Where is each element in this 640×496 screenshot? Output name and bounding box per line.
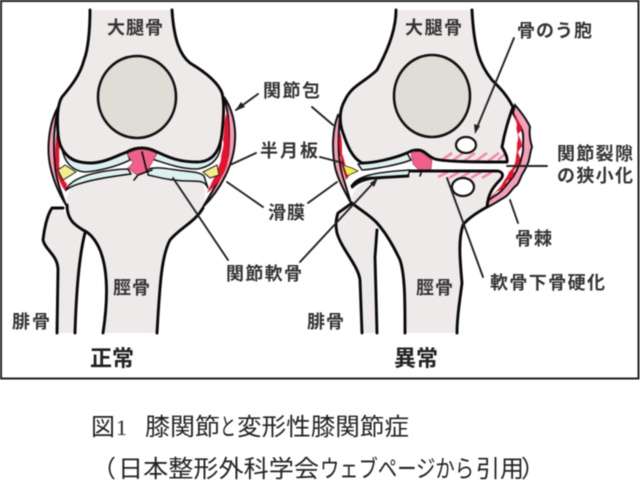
label: capsule: 関節包 bbox=[263, 80, 320, 101]
femur marrow circle bbox=[98, 56, 176, 138]
leader: joint space bbox=[507, 165, 547, 167]
panel: normal knee bbox=[43, 10, 235, 333]
arrow: capsule right bbox=[312, 107, 333, 125]
caption line 2: ） bbox=[521, 456, 545, 483]
normal femur bbox=[57, 10, 223, 163]
bone cyst lower bbox=[452, 178, 474, 196]
label: abnormal: 異常 bbox=[394, 346, 438, 371]
label: tibia normal: 脛骨 bbox=[113, 278, 150, 298]
arrowhead: bone cyst bbox=[474, 124, 480, 134]
caption line 1: と bbox=[220, 414, 236, 441]
normal meniscus right bbox=[203, 165, 219, 178]
abnormal meniscus bbox=[343, 165, 358, 176]
abnormal tibia bbox=[352, 171, 502, 333]
femur marrow circle bbox=[394, 55, 470, 137]
normal femoral cartilage right bbox=[152, 138, 221, 169]
leader: osteophyte bbox=[510, 200, 518, 223]
arrow: capsule left bbox=[236, 94, 258, 110]
caption line 1: 1 bbox=[116, 415, 127, 440]
caption line 1 bbox=[91, 414, 409, 441]
label: articular cartilage: 関節軟骨 bbox=[226, 263, 302, 284]
label: bone cyst: 骨のう胞 bbox=[517, 21, 592, 41]
abnormal femoral cartilage bbox=[358, 153, 411, 170]
leader: meniscus left bbox=[230, 153, 256, 165]
abnormal synovium right bbox=[489, 112, 522, 200]
caption line 1: 図 bbox=[91, 414, 115, 441]
label: synovium: 滑膜 bbox=[268, 202, 305, 223]
abnormal capsule left bbox=[333, 115, 351, 203]
abnormal ligament bbox=[411, 151, 432, 171]
leader lines and arrows bbox=[173, 38, 547, 277]
label: tibia abnormal: 脛骨 bbox=[416, 278, 453, 298]
label: joint space line 1: 関節裂隙 bbox=[557, 143, 633, 164]
label: subchondral sclerosis: 軟骨下骨硬化 bbox=[490, 273, 605, 293]
leader: bone cyst bbox=[476, 38, 514, 130]
normal cruciate ligament bbox=[127, 149, 157, 175]
figure frame bbox=[1, 1, 638, 378]
ligament line bbox=[134, 152, 152, 180]
normal meniscus left bbox=[58, 165, 76, 180]
subchondral sclerosis hatching lower bbox=[438, 172, 492, 178]
caption line 2: 日本整形外科学会 bbox=[118, 456, 319, 483]
label: femur abnormal: 大腿骨 bbox=[405, 18, 462, 38]
normal synovium left bbox=[55, 124, 67, 192]
normal bone outlines bbox=[43, 10, 224, 333]
normal fibula bbox=[43, 208, 85, 333]
panel: abnormal knee bbox=[333, 10, 532, 333]
normal capsule left bbox=[49, 107, 66, 205]
label: femur normal: 大腿骨 bbox=[107, 18, 163, 38]
normal tibial cartilage right bbox=[148, 168, 208, 188]
label: fibula normal: 腓骨 bbox=[12, 312, 50, 332]
caption line 2: （ bbox=[92, 456, 116, 483]
abnormal femur bbox=[340, 10, 513, 163]
label: meniscus: 半月板 bbox=[260, 141, 318, 161]
leader: sclerosis bbox=[447, 178, 483, 277]
normal tibial cartilage left bbox=[66, 169, 131, 190]
arrowhead: capsule left bbox=[235, 102, 245, 111]
abnormal tibial cartilage bbox=[352, 170, 410, 188]
label: joint space line 2: の狭小化 bbox=[557, 166, 633, 186]
label: osteophyte: 骨棘 bbox=[515, 229, 552, 249]
abnormal synovium left bbox=[339, 132, 349, 180]
leader: cartilage left bbox=[173, 178, 228, 260]
normal tibia bbox=[67, 172, 205, 333]
leader: synovium left bbox=[227, 182, 263, 207]
ligament tick bbox=[420, 170, 422, 176]
caption line 2 bbox=[92, 456, 545, 483]
label: normal: 正常 bbox=[90, 346, 134, 371]
arrow: cartilage right bbox=[300, 180, 376, 262]
abnormal bone outlines bbox=[336, 10, 513, 333]
subchondral sclerosis hatching upper bbox=[442, 153, 505, 161]
caption line 2: 引用 bbox=[476, 456, 524, 483]
normal femoral cartilage left bbox=[62, 148, 130, 172]
label: fibula abnormal: 腓骨 bbox=[307, 312, 344, 332]
arrowhead: cartilage right bbox=[370, 178, 378, 187]
abnormal fibula bbox=[336, 203, 377, 333]
normal synovium right bbox=[207, 112, 229, 193]
caption line 1: 変形性膝関節症 bbox=[237, 414, 409, 441]
bone cyst upper bbox=[456, 137, 476, 153]
abnormal capsule with osteophytes bbox=[488, 105, 532, 207]
leader: synovium right bbox=[308, 182, 337, 203]
leader: meniscus right bbox=[320, 157, 343, 163]
normal capsule right bbox=[203, 97, 235, 207]
caption line 1: 膝関節 bbox=[145, 414, 220, 441]
caption line 2: ウェブページから bbox=[320, 456, 474, 483]
